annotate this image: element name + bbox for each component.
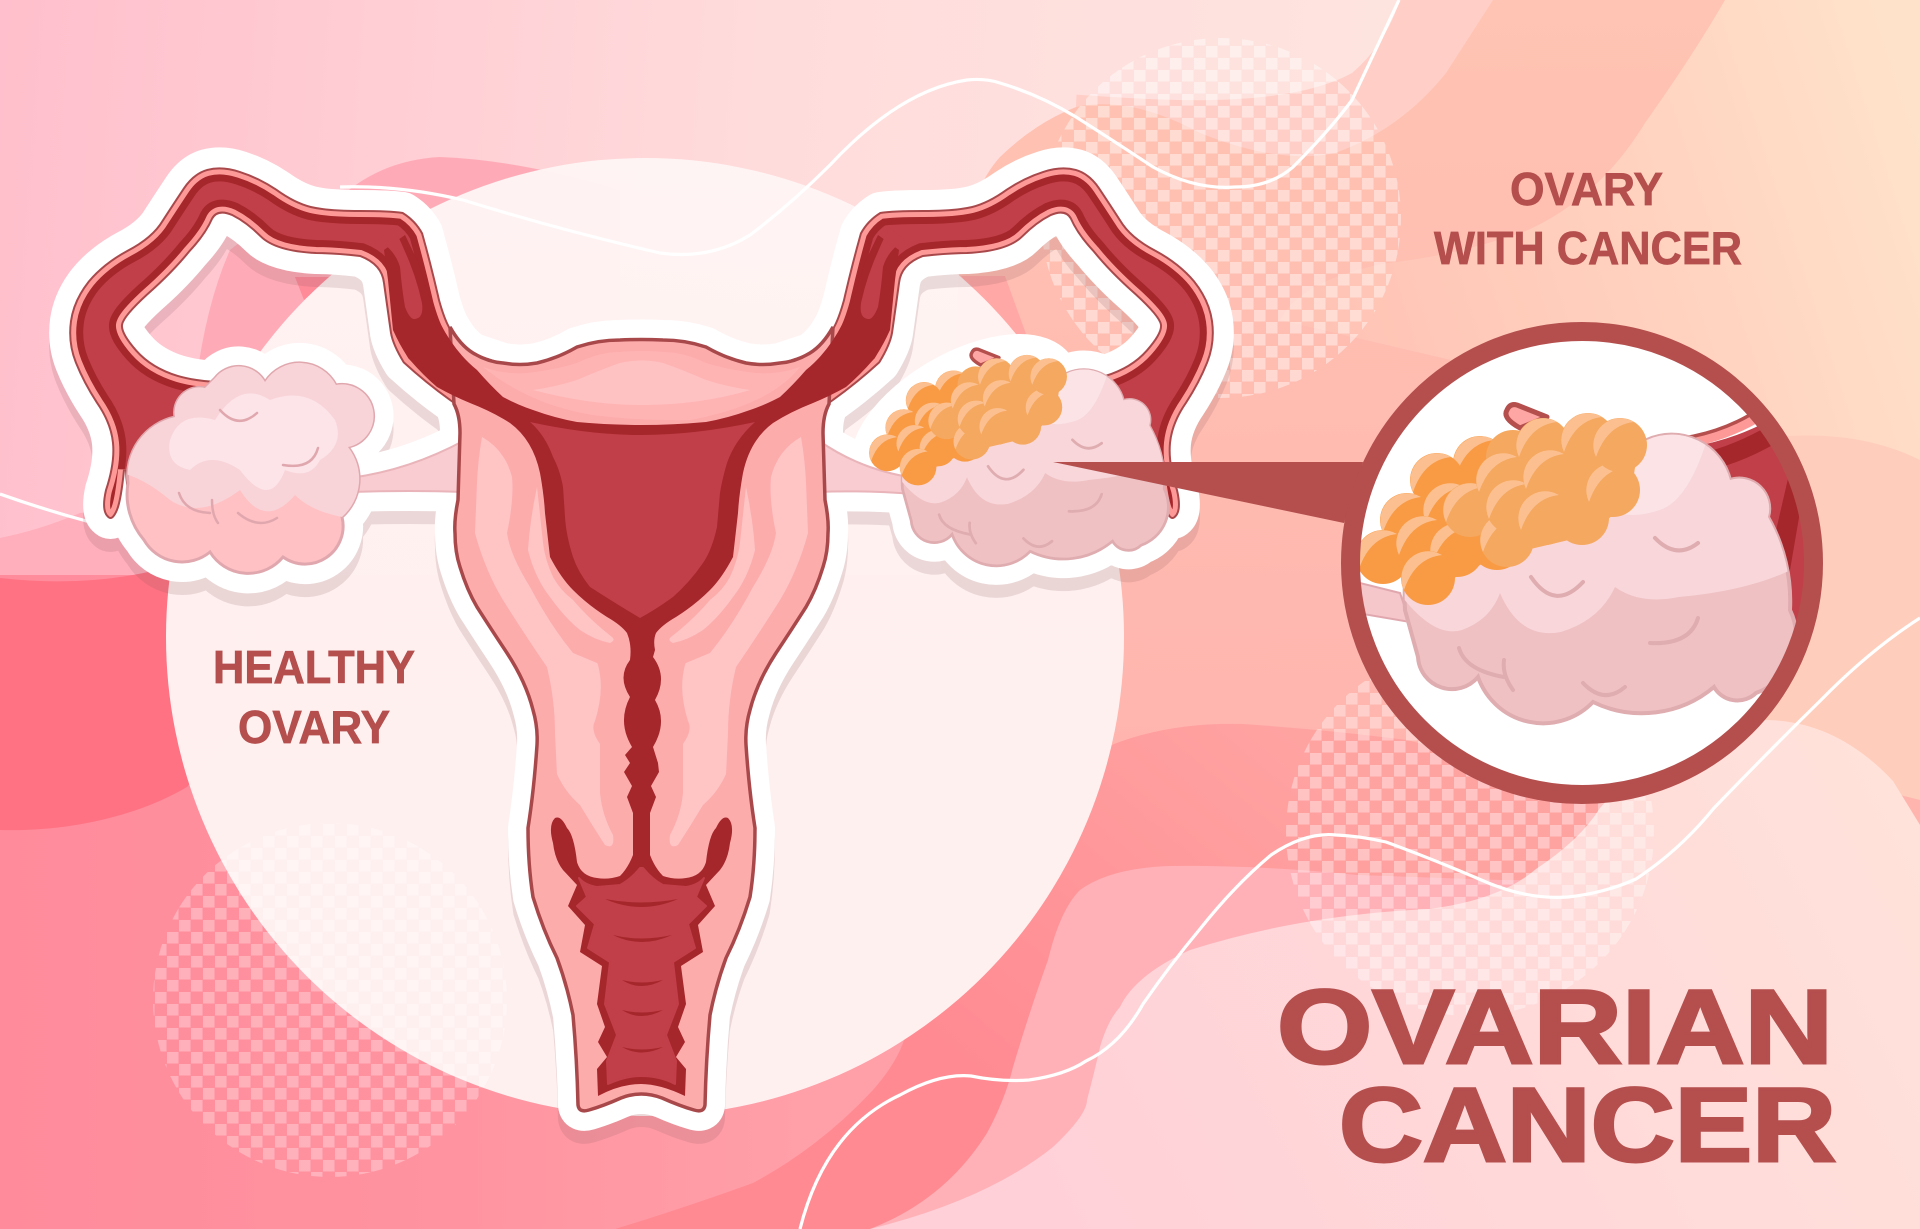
decorative white line: top — [340, 0, 1399, 255]
fallopian tube tongues — [378, 228, 905, 319]
title: ovarian cancer: OVARIAN — [1277, 969, 1833, 1086]
sticker shadow — [69, 180, 1214, 1124]
decorative white line: left — [0, 494, 90, 522]
left fallopian tube — [69, 167, 500, 530]
right fallopian tube — [783, 167, 1214, 530]
big pale circle — [166, 158, 1124, 1116]
label: ovary with cancer — [1434, 163, 1742, 274]
label: ovary with cancer: WITH CANCER — [1434, 222, 1742, 274]
label: healthy ovary: OVARY — [238, 701, 390, 753]
magnified fallopian tube segment — [1688, 414, 1804, 622]
uterine cavity and vaginal canal — [384, 235, 899, 1096]
magnifier ring — [1350, 332, 1814, 794]
title: ovarian cancer — [1277, 969, 1836, 1184]
uterine cavity inner — [530, 422, 755, 618]
label: ovary with cancer: OVARY — [1510, 163, 1663, 215]
title: ovarian cancer: CANCER — [1339, 1067, 1836, 1184]
sticker white outline — [69, 167, 1214, 1111]
vaginal canal inner — [577, 868, 706, 1084]
pointer wedge to magnifier — [1053, 462, 1363, 523]
halftone pattern: lower left — [153, 823, 507, 1177]
healthy left ovary — [100, 350, 380, 573]
magnifier: ovary with cancer — [1340, 332, 1814, 794]
uterus body — [450, 327, 833, 1111]
magnified ligament — [1360, 582, 1406, 622]
halftone pattern: top right — [1041, 38, 1401, 398]
label: healthy ovary — [213, 641, 415, 753]
label: healthy ovary: HEALTHY — [213, 641, 415, 693]
magnified ovary and tumour — [1356, 405, 1810, 723]
ligaments — [350, 440, 915, 494]
halftone pattern: lower right — [1286, 648, 1654, 1016]
right ovary with cancer cluster — [869, 349, 1178, 566]
reproductive system diagram — [69, 167, 1214, 1124]
decorative white line: bottom — [800, 618, 1920, 1229]
